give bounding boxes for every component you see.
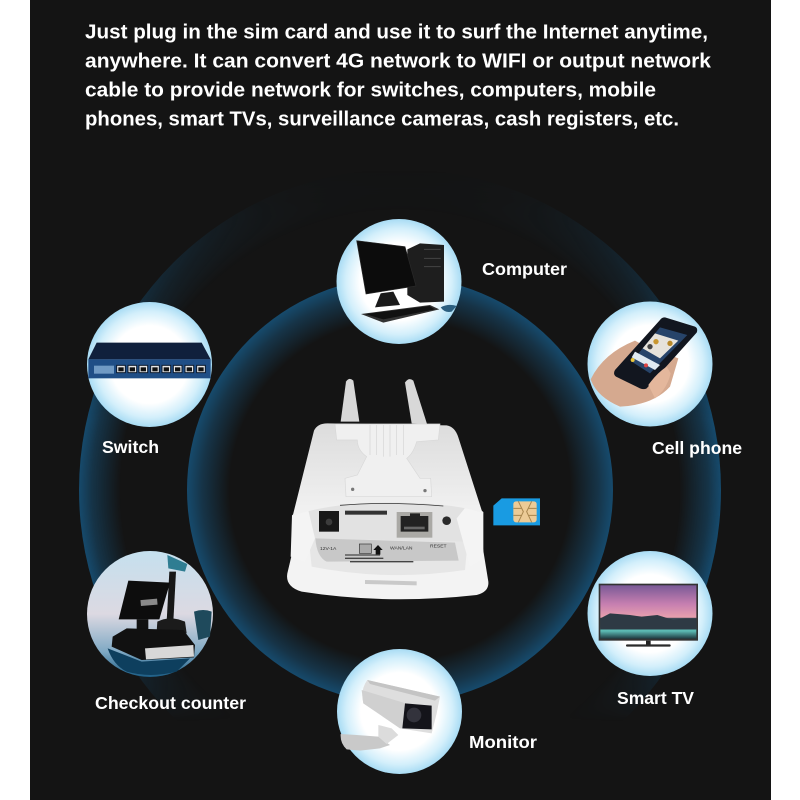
label sticker — [315, 538, 459, 562]
lower cover — [287, 520, 488, 599]
card slot — [345, 511, 387, 515]
node: cell phone — [588, 302, 712, 426]
icon: phone in hand — [591, 317, 697, 407]
reset button — [442, 516, 451, 525]
ethernet port — [397, 512, 432, 538]
header text block: Just plug in the sim card and use it to surf the Internet anytime, — [85, 20, 708, 44]
icon: security camera — [341, 680, 440, 751]
monitor label: Monitor — [469, 732, 537, 752]
cell phone label: Cell phone — [652, 438, 742, 458]
router device — [287, 379, 488, 599]
header text block: cable to provide network for switches, computers, mobile — [85, 78, 656, 102]
cavity floor — [307, 517, 470, 575]
checkout counter label: Checkout counter — [95, 693, 246, 713]
SIM chip — [513, 501, 537, 522]
screw — [351, 488, 354, 491]
cell phone disc — [588, 302, 712, 426]
computer label: Computer — [482, 259, 567, 279]
smart TV disc — [588, 551, 712, 676]
computer disc — [336, 219, 462, 344]
inner blue ring — [187, 277, 613, 703]
mounting bracket — [335, 424, 440, 497]
smart TV label: Smart TV — [617, 688, 694, 708]
slot gap — [340, 503, 443, 506]
main body shell — [293, 423, 483, 516]
cover slot — [365, 580, 417, 585]
SIM card icon — [493, 498, 540, 525]
label sticker: 12V-1A — [320, 546, 337, 552]
chip lines — [513, 501, 537, 522]
left clip — [291, 503, 315, 562]
icon: computer — [357, 241, 457, 323]
switch label: Switch — [102, 437, 159, 457]
port wall — [298, 502, 478, 542]
icon: network switch — [88, 343, 211, 378]
node: checkout counter — [87, 551, 213, 677]
header text block: anywhere. It can convert 4G network to WIFI or output network — [85, 50, 712, 72]
checkout disc — [87, 551, 213, 677]
node: monitor — [337, 649, 462, 774]
screw — [423, 489, 427, 492]
label sticker: RESET — [430, 543, 447, 549]
node: computer — [336, 219, 462, 344]
label sticker: WAN/LAN — [390, 545, 413, 551]
outer blue ring — [79, 214, 721, 705]
bracket ribs — [370, 425, 403, 457]
node: smart TV — [588, 551, 712, 676]
header text block — [85, 20, 712, 130]
icon: television — [599, 584, 698, 647]
switch disc — [87, 302, 212, 427]
header text block: phones, smart TVs, surveillance cameras, cash registers, etc. — [85, 108, 679, 130]
right clip — [457, 502, 483, 567]
monitor disc — [337, 649, 462, 774]
antennas — [341, 379, 427, 425]
node: switch — [87, 302, 212, 427]
power port — [319, 511, 339, 532]
icon: cash register — [108, 555, 212, 675]
